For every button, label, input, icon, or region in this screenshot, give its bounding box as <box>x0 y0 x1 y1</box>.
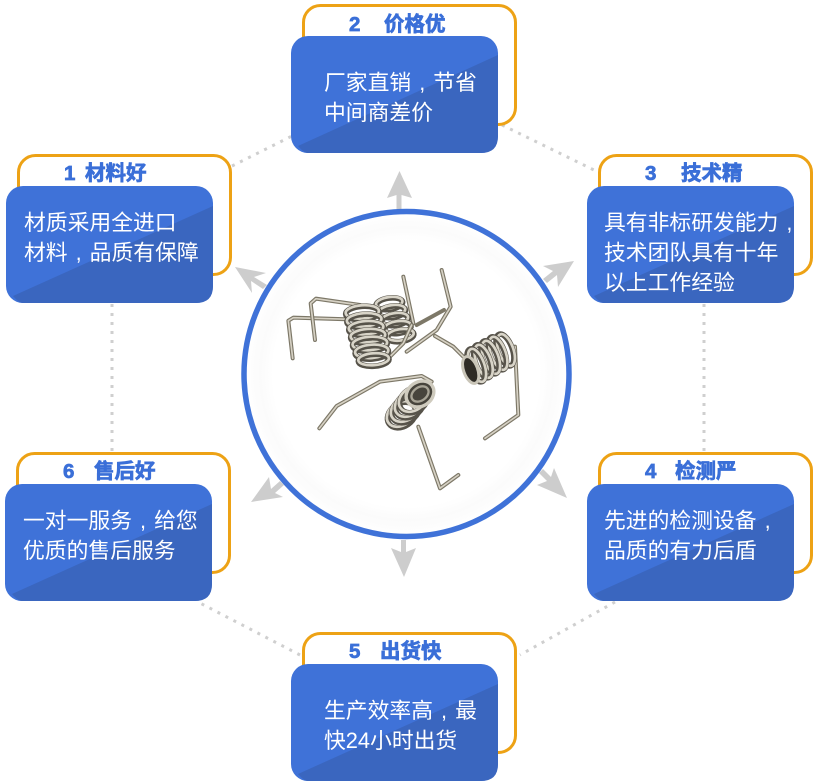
text: 先进的检测设备，品质的有力后盾: 先进的检测设备 , <box>604 508 771 533</box>
text: 生产效率高，最快24小时出货: 生产效率高 , 最 <box>324 698 477 723</box>
spring: right <box>435 332 519 438</box>
text: 材质采用全进口材料，品质有保障: 材质采用全进口 <box>24 210 177 235</box>
panel: 4 检测严 <box>587 454 812 601</box>
central circle <box>244 212 569 536</box>
panel: 1 材料好 <box>6 156 230 303</box>
text: 先进的检测设备，品质的有力后盾 <box>604 508 771 563</box>
heading: 6 售后好: 售后好 <box>94 460 156 483</box>
spring: back <box>375 270 451 352</box>
text: 具有非标研发能力，技术团队具有十年以上工作经验: 具有非标研发能力 , <box>604 210 792 235</box>
text: 生产效率高，最快24小时出货: 快24小时出货 <box>324 728 457 753</box>
product photo: torsion springs <box>288 270 519 488</box>
panel: 2 价格优 <box>291 6 516 153</box>
text: 具有非标研发能力，技术团队具有十年以上工作经验: 技术团队具有十年 <box>604 240 778 265</box>
arrow: lower right <box>537 468 567 498</box>
heading: 4 检测严: 检测严 <box>675 459 736 483</box>
heading: 1 材料好: 1 <box>64 162 75 185</box>
text: 具有非标研发能力，技术团队具有十年以上工作经验 <box>604 210 792 295</box>
text: 厂家直销，节省中间商差价 <box>324 70 477 125</box>
text: 一对一服务，给您优质的售后服务 <box>23 508 198 563</box>
heading: 1 材料好: 材料好 <box>85 162 146 185</box>
heading: 2 价格优: 价格优 <box>384 13 446 36</box>
text: 具有非标研发能力，技术团队具有十年以上工作经验: 以上工作经验 <box>604 270 735 295</box>
text: 材质采用全进口材料，品质有保障 <box>24 210 199 265</box>
heading: 3 技术精: 技术精 <box>681 162 742 185</box>
spring: bottom <box>319 376 458 488</box>
arrow: upper right <box>543 261 574 287</box>
text: 生产效率高，最快24小时出货 <box>324 698 477 753</box>
text: 先进的检测设备，品质的有力后盾: 品质的有力后盾 <box>604 538 757 563</box>
heading: 2 价格优: 2 <box>349 13 360 36</box>
text: 材质采用全进口材料，品质有保障: 材料 , 品质有保障 <box>24 240 199 265</box>
text: 一对一服务，给您优质的售后服务: 优质的售后服务 <box>23 538 176 563</box>
heading: 3 技术精: 3 <box>645 162 656 185</box>
heading: 4 检测严: 4 <box>645 460 657 483</box>
text: 一对一服务，给您优质的售后服务: 一对一服务 , 给您 <box>23 508 198 533</box>
heading: 6 售后好: 6 <box>63 460 74 483</box>
text: 厂家直销，节省中间商差价: 中间商差价 <box>324 100 433 125</box>
heading: 5 出货快: 5 <box>349 640 360 663</box>
panel: 5 出货快 <box>291 634 516 781</box>
spring: front left <box>288 299 412 368</box>
arrow: down <box>391 540 416 577</box>
arrow: lower left <box>251 477 284 502</box>
panel: 6 售后好 <box>5 454 230 601</box>
text: 厂家直销，节省中间商差价: 厂家直销 , 节省 <box>324 70 477 95</box>
panel: 3 技术精 <box>587 156 812 303</box>
arrow: up <box>387 171 412 209</box>
arrow: upper left <box>235 267 267 293</box>
heading: 5 出货快: 出货快 <box>380 639 442 663</box>
